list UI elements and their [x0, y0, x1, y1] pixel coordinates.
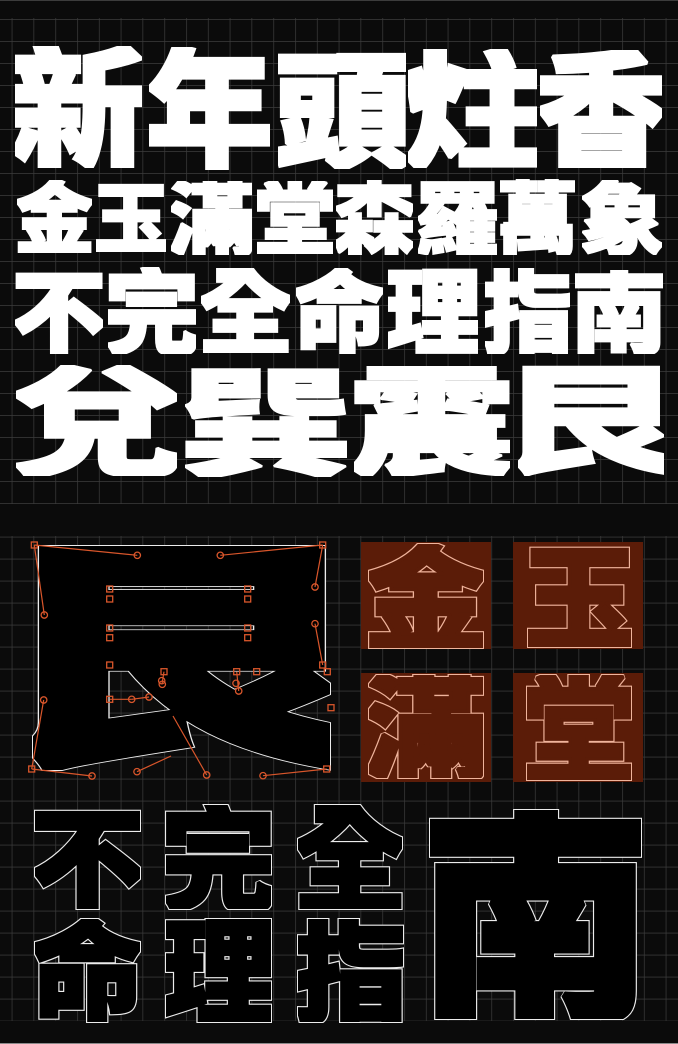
row 1: 新年頭炷香: 新 [9, 37, 148, 186]
outlined characters: 不完全命理指南: 理 [160, 912, 277, 1039]
outlined characters: 不完全命理指南: 全 [292, 798, 408, 926]
panel group: rust tiles with outlined 金玉滿堂 [361, 536, 643, 797]
row 3: 不完全命理指南: 理 [384, 262, 482, 367]
outlined characters: 不完全命理指南: 命 [29, 912, 146, 1039]
bezier handles and anchor points [29, 542, 334, 779]
glyph editing view: 艮 outline with bezier handles [0, 526, 373, 796]
row 4: 兌巽震艮: 兌 [9, 357, 184, 492]
outlined characters: 不完全命理指南: 南 [420, 794, 651, 1044]
row 2: 金玉滿堂森羅萬象: 滿 [168, 176, 255, 266]
outlined characters: 不完全命理指南: 不 [29, 801, 146, 926]
tile: 滿: 滿 [363, 667, 489, 794]
row 2: 金玉滿堂森羅萬象: 玉 [93, 178, 169, 263]
row 1: 新年頭炷香: 年 [144, 39, 275, 189]
row 4: 兌巽震艮: 震 [347, 359, 517, 493]
outlined characters: 不完全命理指南: 完 [160, 796, 277, 926]
row 3: 不完全命理指南: 命 [292, 262, 387, 366]
row 2: 金玉滿堂森羅萬象: 羅 [415, 176, 500, 266]
row 1: 新年頭炷香 [9, 37, 667, 189]
row 4: 兌巽震艮: 巽 [178, 359, 354, 493]
outlined characters: 不完全命理指南: 南 [420, 794, 651, 1044]
row 3: 不完全命理指南: 指 [481, 262, 574, 367]
row 4: 兌巽震艮 [9, 356, 678, 493]
row 2: 金玉滿堂森羅萬象: 堂 [254, 177, 336, 265]
outlined character 艮: 艮 [0, 526, 373, 796]
row 3: 不完全命理指南: 完 [104, 262, 200, 367]
outlined characters: 不完全命理指南: 完 [160, 796, 277, 926]
row 3: 不完全命理指南 [11, 262, 667, 367]
row 3: 不完全命理指南: 不 [11, 264, 107, 366]
title: solid white character rows [9, 37, 678, 493]
outlined character 艮: 艮 [0, 526, 373, 796]
row 2: 金玉滿堂森羅萬象: 萬 [497, 175, 578, 267]
row 1: 新年頭炷香: 炷 [402, 41, 543, 185]
outlined characters: 不完全命理指南: 命 [29, 912, 146, 1039]
outlined characters: 不完全命理指南: 指 [292, 912, 409, 1039]
outlined characters: 不完全命理指南 [29, 794, 651, 1044]
tile: 玉: 玉 [523, 538, 636, 663]
outlined characters: 不完全命理指南: 指 [292, 912, 409, 1039]
row 3: 不完全命理指南: 全 [197, 263, 294, 366]
row 2: 金玉滿堂森羅萬象 [14, 174, 665, 267]
tile: 滿: 滿 [363, 667, 489, 794]
tile: 金: 金 [363, 536, 489, 665]
row 2: 金玉滿堂森羅萬象: 森 [333, 174, 416, 266]
tile: 玉: 玉 [523, 538, 636, 663]
row 2: 金玉滿堂森羅萬象: 象 [579, 175, 665, 266]
tile: 堂: 堂 [521, 666, 637, 797]
outlined characters: 不完全命理指南: 不 [29, 801, 146, 926]
row 3: 不完全命理指南: 南 [571, 264, 667, 366]
outlined characters: 不完全命理指南: 全 [292, 798, 408, 926]
row 1: 新年頭炷香: 頭 [272, 44, 412, 186]
outlined characters: 不完全命理指南: 理 [160, 912, 277, 1039]
row 2: 金玉滿堂森羅萬象: 金 [14, 176, 95, 264]
tile: 金: 金 [363, 536, 489, 665]
row 1: 新年頭炷香: 香 [535, 42, 667, 185]
tile: 堂: 堂 [521, 666, 637, 797]
